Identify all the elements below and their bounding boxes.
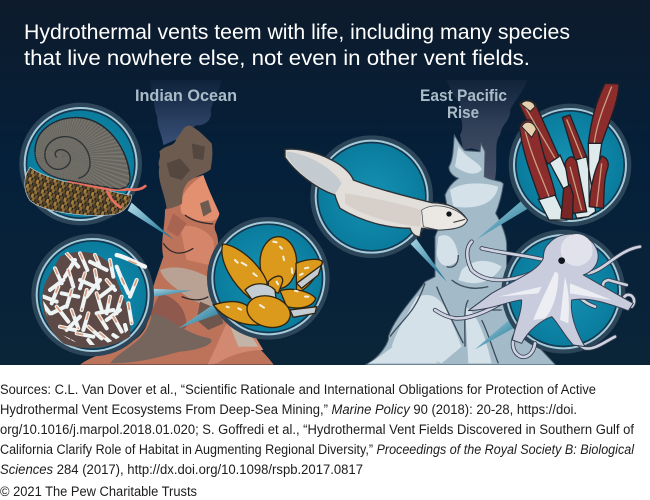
shrimp bodies [40,253,137,348]
title: that live nowhere else, not even in other vent fields. [24,46,530,70]
mussel: top centre [260,237,297,289]
snail pink foot [68,181,145,207]
rock under shrimp [42,252,131,348]
red tube plumes [519,100,559,164]
callout pointers: Indian Ocean [128,203,218,328]
chimney cap: brown rock [159,126,212,209]
snail shell [35,117,130,189]
callout pointers: East Pacific Rise [407,201,530,349]
white shell speckles [227,242,308,310]
fish eye [446,211,452,217]
icon: octopus circle [501,230,625,354]
label: East Pacific Rise [420,86,507,122]
panel: East Pacific Rise vent [285,80,640,365]
icon: eelpout fish [285,149,467,237]
octopus eye [558,257,565,264]
title [24,20,570,70]
mussel: front big [246,295,291,328]
tube highlights [525,87,612,210]
smoke plume: Indian Ocean [150,80,222,145]
icon: shrimp swarm [31,234,154,356]
panel: Indian Ocean vent [19,80,330,365]
dark ocean background panel [0,0,650,365]
copyright: © 2021 The Pew Charitable Trusts [0,484,197,499]
icon: octopus [435,234,640,357]
icon: mussels [207,217,330,340]
icon: tubeworms [509,83,631,226]
chimney: East Pacific Rise [365,135,556,365]
smoke plume: East Pacific Rise [447,80,527,180]
snail foot scales [25,167,132,215]
sources text block: Hydrothermal Vent Ecosystems From Deep-Sea Mining,” Marine Policy 90 (2018): 20-28, https://doi. [0,402,577,417]
sources text block: California Clarify Role of Habitat in Augmenting Regional Diversity,” Proceedings of the Royal Society B: Biological [0,442,635,457]
sources text block: Sciences 284 (2017), http://dx.doi.org/10.1098/rspb.2017.0817 [0,462,363,477]
octopus arm outlines [435,242,640,357]
label: East Pacific Rise: Rise [447,103,479,122]
chimney: Indian Ocean [79,126,274,365]
octopus head and body [468,234,633,347]
label: Indian Ocean: Indian Ocean [135,86,237,105]
title: Hydrothermal vents teem with life, including many species [24,20,570,44]
icon: scaly-foot snail [19,103,145,225]
mussel: lower right [280,289,316,308]
mussel: right [296,259,323,293]
sources text block: org/10.1016/j.marpol.2018.01.020; S. Goffredi et al., “Hydrothermal Vent Fields Discovered in Southern Gulf of [0,422,634,437]
lone shrimp [117,255,145,267]
mussel: left [222,244,267,298]
label: East Pacific Rise: East Pacific [420,86,507,105]
icon: fish circle [310,135,433,258]
chimney highlights [368,147,502,363]
mussel: small centre [268,276,283,293]
sources text block [0,382,635,477]
gray shell inner [244,283,277,300]
tube shells [538,143,602,220]
sources text block: Sources: C.L. Van Dover et al., “Scientific Rationale and International Obligations for Protection of Active [0,382,596,397]
